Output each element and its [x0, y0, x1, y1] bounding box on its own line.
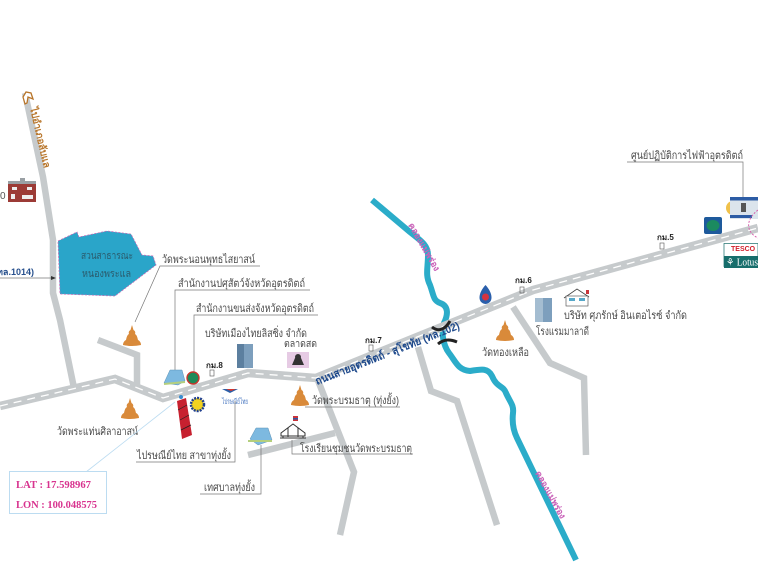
river label south: คลองแม่พร่อง	[533, 469, 568, 520]
label: Wat Phra Non	[135, 253, 260, 322]
park	[58, 231, 156, 296]
label: transport office: สำนักงานขนส่งจังหวัดอุตรดิตถ์	[196, 302, 314, 315]
label: Wat Thong Lue: วัดทองเหลือ	[482, 346, 529, 359]
label: Mueang Thai Leasing: บริษัทเมืองไทยลิสซิ่ง จำกัด	[205, 325, 307, 340]
label: market: ตลาดสด	[284, 339, 317, 350]
icon: yellow emblem	[191, 398, 204, 411]
icon: house with number	[0, 178, 36, 202]
icon: hotel tower	[535, 298, 552, 322]
icon: Tesco Lotus: TESCO	[731, 246, 756, 253]
label: transport office	[194, 302, 318, 372]
icon: school	[280, 416, 306, 438]
icon: Tesco Lotus	[724, 244, 758, 268]
bridge	[432, 321, 457, 344]
callout: coordinates: LAT : 17.598967	[16, 480, 91, 491]
label: km 5: กม.5	[657, 233, 674, 242]
label: Wat Borom That: วัดพระบรมธาตุ (ทุ่งยั้ง)	[312, 392, 399, 407]
park: หนองพระแล	[82, 268, 131, 280]
main road	[0, 228, 758, 406]
label: km 7	[365, 336, 382, 351]
icon: Thailand Post logo	[221, 389, 248, 406]
park: สวนสาธารณะ	[81, 250, 133, 262]
icon: green leaf logo	[704, 217, 722, 234]
label: km 7: กม.7	[365, 336, 382, 345]
road label: Uttaradit-Sukhothai: ถนนสายอุตรดิตถ์ - สุโขทัย (ทล.102)	[313, 318, 462, 389]
label: municipality	[200, 445, 261, 494]
label: Supparak Enterprise: บริษัท ศุภรักษ์ อินเตอไรซ์ จำกัด	[564, 309, 687, 322]
label: livestock office: สำนักงานปศุสัตว์จังหวัดอุตรดิตถ์	[178, 277, 305, 290]
river label north: คลองแม่พร่อง	[406, 221, 442, 273]
icon: municipality building	[248, 428, 272, 445]
label: km 8	[206, 361, 223, 376]
road label: 1014	[0, 267, 56, 280]
label: municipality: เทศบาลทุ่งยั้ง	[204, 479, 255, 494]
pink dashed arc	[749, 210, 758, 238]
icon: electricity building	[726, 197, 758, 219]
river	[372, 200, 576, 560]
label: Thailand Post: ไปรษณีย์ไทย สาขาทุ่งยั้ง	[136, 447, 231, 462]
icon: Buddha north	[123, 325, 141, 346]
label: school: โรงเรียนชุมชนวัดพระบรมธาตุ	[300, 441, 412, 455]
label: hotel: โรงแรมมาลาดี	[536, 324, 589, 338]
icon: company house	[564, 289, 589, 306]
label: km 5	[657, 233, 674, 249]
icon: market	[287, 352, 309, 368]
side roads	[25, 93, 586, 535]
label: livestock office	[175, 277, 310, 370]
icon: PTT station	[479, 285, 492, 304]
icon: Buddha east	[496, 320, 514, 341]
icon: livestock building	[164, 370, 185, 385]
icon: Thailand Post logo: ไปรษณีย์ไทย	[221, 397, 248, 406]
icon: office tower	[237, 344, 253, 368]
label: Wat Phra Non: วัดพระนอนพุทธไสยาสน์	[162, 253, 255, 266]
icon: Buddha central	[291, 385, 309, 406]
label: Thailand Post	[136, 401, 235, 462]
label: electricity centre	[627, 149, 743, 198]
label: school	[292, 440, 413, 455]
icon: Buddha west	[121, 398, 139, 419]
icon: transport emblem	[187, 372, 199, 384]
callout: coordinates	[10, 402, 175, 514]
label: Wat Phra Thaen: วัดพระแท่นศิลาอาสน์	[57, 425, 138, 438]
label: km 8: กม.8	[206, 361, 223, 370]
label: km 6: กม.6	[515, 276, 532, 285]
label: Wat Borom That	[305, 392, 400, 407]
callout: coordinates: LON : 100.048575	[16, 500, 97, 511]
road label: north: ไปอำเภอลับแล	[27, 105, 54, 169]
label: km 6	[515, 276, 532, 293]
icon: red marker bar	[177, 395, 192, 439]
road label: north	[23, 92, 54, 169]
icon: house with number: 0	[0, 191, 6, 202]
